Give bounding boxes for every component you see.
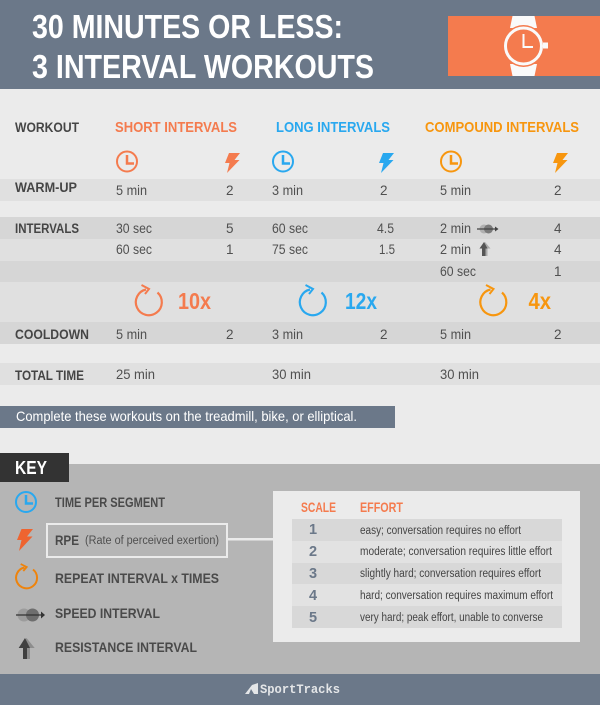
- repeat: short intervals 10x: 10x: [178, 288, 211, 314]
- icon: resistance interval small: [480, 242, 490, 256]
- RPE scale table: hard; conversation requires maximum effort: [360, 590, 554, 602]
- row: intervals: 60 sec: [440, 264, 476, 279]
- row: intervals: 30 sec: [116, 221, 152, 236]
- table row bands: [0, 179, 600, 385]
- row: intervals: 4: [554, 221, 562, 236]
- key: speed interval: SPEED INTERVAL: [55, 605, 160, 621]
- row: cooldown: 3 min: [272, 327, 303, 342]
- column headings: SHORT INTERVALS: [115, 119, 237, 136]
- row: warm-up: WARM-UP: [15, 180, 77, 195]
- column icons: [117, 152, 568, 173]
- RPE scale table: 3: [309, 566, 317, 582]
- row: warm-up: 3 min: [272, 183, 303, 198]
- RPE scale table: EFFORT: [360, 499, 403, 515]
- RPE scale table: very hard; peak effort, unable to converse: [360, 612, 543, 624]
- key: RPE: RPE: [55, 532, 79, 548]
- row: warm-up: 5 min: [440, 183, 471, 198]
- row: intervals: 60 sec: [116, 242, 152, 257]
- row: intervals: 2 min: [440, 242, 471, 257]
- RPE scale table: SCALE: [301, 499, 336, 515]
- footer: SportTracks: [260, 682, 340, 697]
- row: warm-up: 2: [226, 183, 234, 198]
- column headings: [15, 119, 579, 136]
- row: cooldown: [15, 327, 562, 342]
- column headings: COMPOUND INTERVALS: [425, 119, 579, 136]
- row: total time: TOTAL TIME: [15, 368, 84, 383]
- row: intervals: 1: [226, 242, 234, 257]
- RPE scale table: moderate; conversation requires little effort: [360, 546, 553, 558]
- key: speed interval: [16, 605, 160, 622]
- note bar: Complete these workouts on the treadmill, bike, or elliptical.: [16, 408, 357, 424]
- footer: [0, 674, 600, 705]
- title: 30 MINUTES OR LESS:: [32, 8, 343, 45]
- icon: SportTracks logo: [245, 683, 258, 694]
- RPE scale table: 2: [309, 544, 317, 560]
- title: 3 INTERVAL WORKOUTS: [32, 48, 374, 85]
- RPE scale table: 4: [309, 588, 317, 604]
- RPE scale table: [273, 491, 580, 642]
- row: cooldown: 5 min: [440, 327, 471, 342]
- key: resistance interval: [19, 638, 197, 659]
- row: cooldown: 2: [380, 327, 388, 342]
- icon: watch: [448, 16, 600, 76]
- key: repeat interval: [16, 564, 219, 588]
- row: total time: 30 min: [272, 367, 311, 382]
- RPE scale table: slightly hard; conversation requires effort: [360, 568, 542, 580]
- row: total time: 25 min: [116, 367, 155, 382]
- key heading: [0, 453, 69, 482]
- row: warm-up: 5 min: [116, 183, 147, 198]
- repeat: long intervals 12x: 12x: [345, 288, 377, 314]
- key: RPE: (Rate of perceived exertion): [85, 535, 219, 547]
- note bar: [0, 406, 395, 428]
- header banner: [0, 0, 600, 89]
- row: warm-up: [15, 180, 562, 198]
- row: intervals: 1: [554, 264, 562, 279]
- row: intervals: 4: [554, 242, 562, 257]
- row: intervals: 5: [226, 221, 234, 236]
- key heading: KEY: [15, 458, 47, 478]
- key panel: [0, 453, 600, 674]
- row: intervals: [15, 221, 562, 279]
- repeat: compound intervals 4x: 4x: [528, 288, 551, 314]
- row: warm-up: 2: [380, 183, 388, 198]
- title: [32, 8, 374, 85]
- RPE scale table: 5: [309, 610, 317, 626]
- row: cooldown: COOLDOWN: [15, 327, 89, 342]
- RPE scale table: easy; conversation requires no effort: [360, 525, 522, 537]
- row: intervals: 2 min: [440, 221, 471, 236]
- key: time per segment: TIME PER SEGMENT: [55, 494, 165, 510]
- icon: speed interval small: [477, 224, 498, 234]
- key: time per segment: [16, 492, 165, 512]
- row: total time: 30 min: [440, 367, 479, 382]
- key: resistance interval: RESISTANCE INTERVAL: [55, 639, 197, 655]
- row: cooldown: 5 min: [116, 327, 147, 342]
- repeat: compound intervals 4x: [480, 285, 551, 315]
- repeat: short intervals 10x: [136, 285, 211, 315]
- row: warm-up: 2: [554, 183, 562, 198]
- row: intervals: 60 sec: [272, 221, 308, 236]
- repeat: long intervals 12x: [300, 285, 377, 315]
- column headings: LONG INTERVALS: [276, 119, 390, 136]
- RPE scale table: 1: [309, 522, 317, 538]
- row: cooldown: 2: [554, 327, 562, 342]
- row: intervals: 1.5: [379, 242, 395, 257]
- column headings: WORKOUT: [15, 120, 80, 135]
- row: intervals: INTERVALS: [15, 221, 79, 236]
- row: intervals: 4.5: [377, 221, 394, 236]
- key: RPE: [17, 524, 273, 557]
- key: repeat interval: REPEAT INTERVAL x TIMES: [55, 570, 219, 586]
- row: intervals: 75 sec: [272, 242, 308, 257]
- row: cooldown: 2: [226, 327, 234, 342]
- row: total time: [15, 367, 479, 383]
